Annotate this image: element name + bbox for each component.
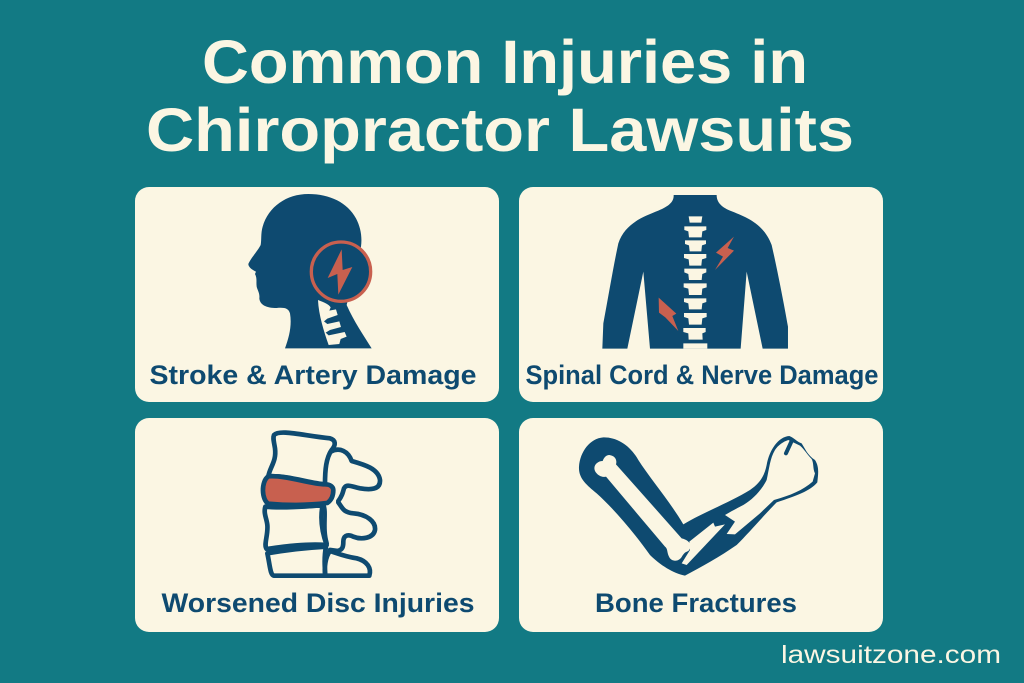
broken radius fragment	[682, 523, 725, 565]
panel: worsened disc injuries	[135, 418, 499, 632]
fist finger hook	[786, 441, 792, 453]
title: Common Injuries in	[202, 28, 808, 96]
title: Chiropractor Lawsuits	[146, 96, 854, 164]
panel: spinal cord and nerve damage	[519, 187, 883, 402]
icon: head with neck and lightning	[248, 194, 372, 348]
icon: back torso with spine	[602, 195, 788, 349]
label: Worsened Disc Injuries	[162, 588, 474, 618]
nerve bolts	[715, 237, 734, 270]
humerus bone	[594, 455, 691, 561]
icon: vertebrae with herniated disc	[263, 433, 380, 576]
label: Spinal Cord & Nerve Damage	[526, 360, 878, 390]
icon: fractured arm	[579, 436, 818, 576]
arm interior: forearm and fist	[725, 440, 815, 534]
panel: bone fractures	[519, 418, 883, 632]
spine vertebrae	[683, 216, 707, 349]
label: Stroke & Artery Damage	[150, 360, 476, 390]
title	[146, 28, 854, 164]
label: Bone Fractures	[595, 588, 797, 618]
panel: stroke and artery damage	[135, 187, 499, 402]
website credit: lawsuitzone.com	[781, 641, 1001, 669]
